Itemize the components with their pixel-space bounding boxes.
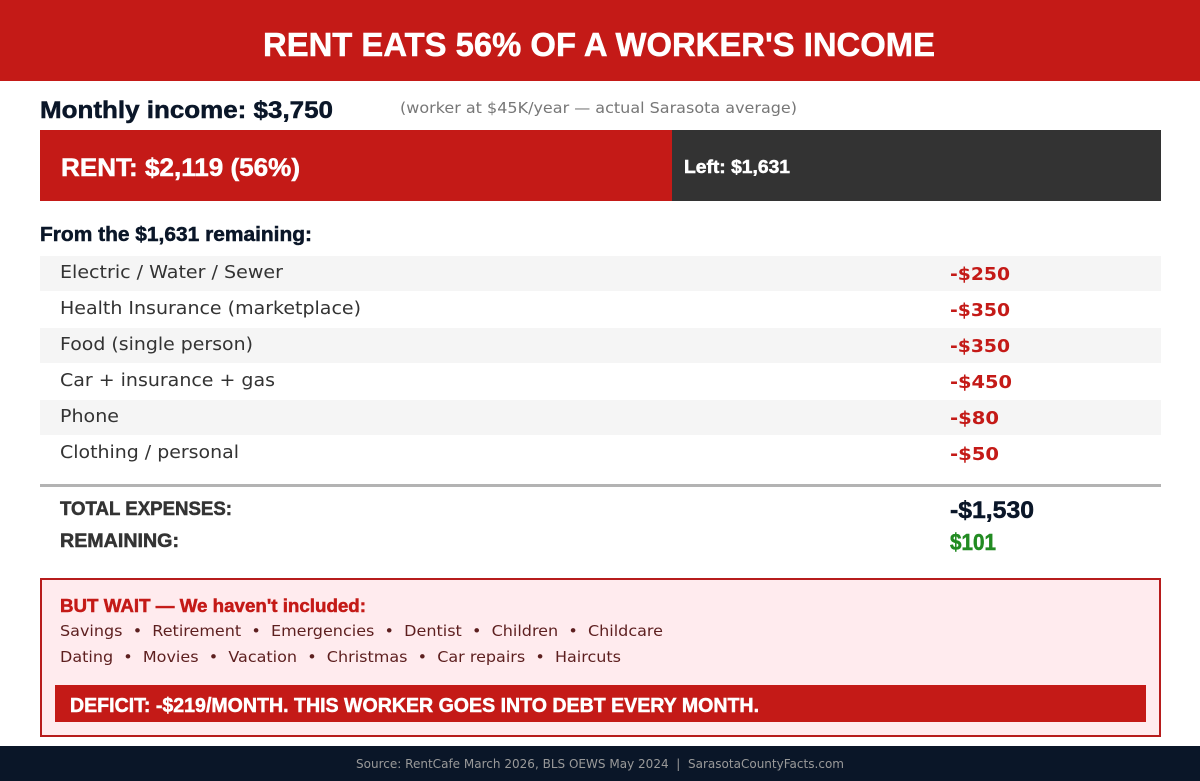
remaining segment: Left: $1,631 xyxy=(684,157,790,177)
source line: Source: RentCafe March 2026, BLS OEWS May 2024 | SarasotaCountyFacts.com xyxy=(356,757,844,771)
row: food xyxy=(40,328,1161,363)
warning panel xyxy=(41,579,1160,736)
footer xyxy=(0,746,1200,781)
total expenses xyxy=(60,497,1034,524)
rent segment xyxy=(40,130,672,201)
row: health insurance: -$350 xyxy=(950,300,1010,321)
title banner xyxy=(0,0,1200,81)
title: RENT EATS 56% OF A WORKER'S INCOME xyxy=(263,26,935,63)
row: car: -$450 xyxy=(950,372,1012,393)
monthly income heading: Monthly income: $3,750 xyxy=(40,97,333,124)
row: food: Food (single person) xyxy=(60,334,253,355)
row: health insurance xyxy=(60,298,1010,321)
row: electric xyxy=(40,256,1161,291)
total expenses: -$1,530 xyxy=(950,497,1034,524)
remaining segment xyxy=(672,130,1161,201)
expense table xyxy=(40,256,1161,465)
remaining xyxy=(60,529,996,555)
omitted costs line 2: Dating • Movies • Vacation • Christmas • Car repairs • Haircuts xyxy=(60,648,621,666)
row: phone: Phone xyxy=(60,406,119,427)
deficit banner: DEFICIT: -$219/MONTH. THIS WORKER GOES INTO DEBT EVERY MONTH. xyxy=(70,695,759,717)
totals xyxy=(60,497,1034,555)
row: food: -$350 xyxy=(950,336,1010,357)
row: phone: -$80 xyxy=(950,408,999,429)
remaining: REMAINING: xyxy=(60,531,179,552)
warning heading: BUT WAIT — We haven't included: xyxy=(60,596,366,616)
row: car xyxy=(60,370,1012,393)
income split bar xyxy=(40,130,1161,201)
row: electric: -$250 xyxy=(950,264,1010,285)
row: clothing xyxy=(60,442,999,465)
row: electric: Electric / Water / Sewer xyxy=(60,262,284,283)
row: clothing: -$50 xyxy=(950,444,999,465)
row: health insurance: Health Insurance (marketplace) xyxy=(60,298,361,319)
deficit banner xyxy=(55,685,1146,722)
rent segment: RENT: $2,119 (56%) xyxy=(61,154,300,182)
omitted costs line 1: Savings • Retirement • Emergencies • Dentist • Children • Childcare xyxy=(60,622,663,640)
expenses heading: From the $1,631 remaining: xyxy=(40,224,312,246)
remaining: $101 xyxy=(950,529,996,555)
row: clothing: Clothing / personal xyxy=(60,442,239,463)
row: phone xyxy=(40,400,1161,435)
total expenses: TOTAL EXPENSES: xyxy=(60,499,232,520)
income context note: (worker at $45K/year — actual Sarasota average) xyxy=(400,99,797,117)
row: car: Car + insurance + gas xyxy=(60,370,275,391)
